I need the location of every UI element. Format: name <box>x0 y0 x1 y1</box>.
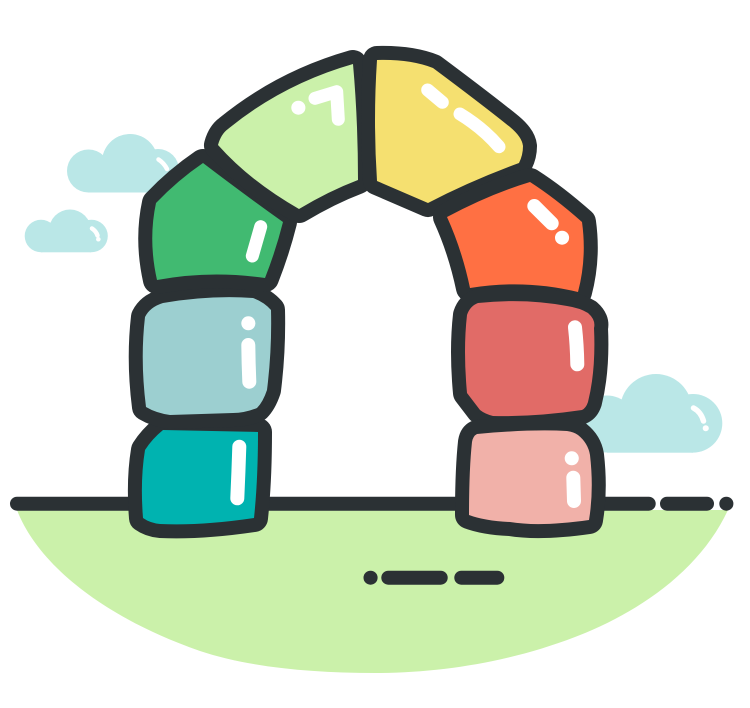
ground: green hill <box>17 510 728 673</box>
cloud: top left <box>67 134 179 192</box>
cloud: right <box>578 374 722 453</box>
stone: yellow <box>375 60 523 203</box>
arch stones <box>142 60 594 524</box>
cloud highlights <box>92 160 706 428</box>
stone outlines <box>142 60 594 524</box>
stone: red <box>465 301 594 416</box>
stone: green <box>152 163 283 280</box>
stone: light green <box>218 64 358 209</box>
stone: teal <box>142 430 258 524</box>
stone: orange <box>447 182 584 292</box>
ground dashes <box>370 571 497 585</box>
stone: pink <box>469 430 592 524</box>
stone: grey blue <box>143 297 271 415</box>
horizon line <box>17 497 726 511</box>
cloud: small left <box>25 210 108 252</box>
stone highlights <box>237 90 577 501</box>
